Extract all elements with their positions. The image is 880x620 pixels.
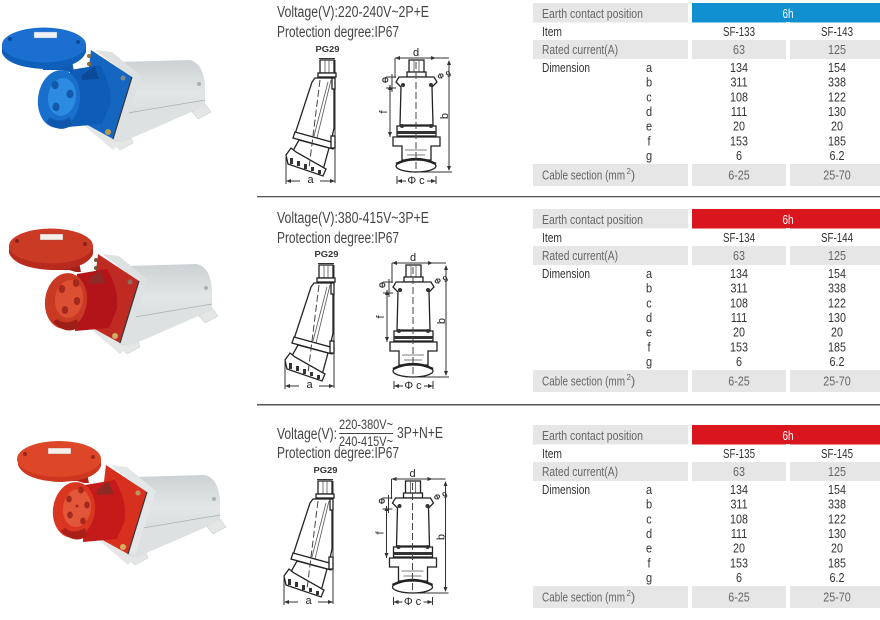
table: specifications SF-134 / SF-144: 63 [733, 249, 745, 263]
table: specifications SF-134 / SF-144: Earth contact position [542, 213, 643, 227]
icon: blue socket product photo [2, 28, 211, 150]
table: specifications SF-135 / SF-145: 6 [736, 571, 742, 585]
table: specifications SF-134 / SF-144: 311 [730, 282, 748, 296]
table: specifications SF-134 / SF-144: ) [631, 374, 635, 388]
table: specifications SF-135 / SF-145: Cable section (mm [542, 590, 625, 604]
table: specifications SF-134 / SF-144: a [646, 267, 652, 281]
table: specifications SF-135 / SF-145: 125 [828, 465, 846, 479]
table: specifications SF-134 / SF-144: SF-144 [821, 231, 853, 245]
table: specifications SF-135 / SF-145: Item [542, 447, 562, 461]
table: specifications SF-134 / SF-144: 25-70 [823, 375, 851, 389]
table: specifications SF-133 / SF-143: SF-143 [821, 25, 853, 39]
heading: protection degree: Protection degree:IP67 [277, 445, 399, 462]
table: specifications SF-133 / SF-143: Cable section (mm [542, 168, 625, 182]
table: specifications SF-133 / SF-143: 6h [782, 7, 794, 21]
table: specifications SF-134 / SF-144: f [647, 341, 651, 354]
diagram: front view: Φ [378, 497, 386, 506]
table: specifications SF-134 / SF-144: d [646, 311, 652, 325]
table: specifications SF-135 / SF-145 [533, 425, 880, 608]
heading: protection degree: Protection degree:IP67 [277, 230, 399, 247]
table: specifications SF-134 / SF-144: b [646, 282, 652, 296]
table: specifications SF-134 / SF-144: 130 [828, 311, 846, 325]
table: specifications SF-135 / SF-145: 185 [828, 557, 846, 571]
diagram: side view: PG29 [314, 466, 338, 475]
table: specifications SF-133 / SF-143: 108 [730, 91, 748, 105]
table: specifications SF-134 / SF-144: 153 [730, 341, 748, 355]
table: specifications SF-134 / SF-144: 6.2 [830, 355, 844, 369]
table: specifications SF-133 / SF-143: 153 [730, 135, 748, 149]
table: specifications SF-133 / SF-143: 2 [626, 167, 632, 176]
table: specifications SF-135 / SF-145: 108 [730, 513, 748, 527]
table: specifications SF-133 / SF-143: 130 [828, 105, 846, 119]
table: specifications SF-133 / SF-143: 111 [731, 105, 747, 119]
table: specifications SF-134 / SF-144: 125 [828, 249, 846, 263]
diagram: front view: f [375, 315, 387, 319]
table: specifications SF-134 / SF-144: Dimension [542, 267, 590, 281]
heading: voltage with fraction: 240-415V~ [339, 434, 393, 449]
heading: voltage: Voltage(V):220-240V~2P+E [277, 4, 429, 21]
diagram: front view: b [436, 534, 448, 540]
table: specifications SF-135 / SF-145: Dimension [542, 483, 590, 497]
table: specifications SF-135 / SF-145: b [646, 498, 652, 512]
panel: blue socket 2P+E [2, 3, 880, 187]
table: specifications SF-134 / SF-144: 20 [831, 326, 843, 340]
diagram: front view: b [436, 318, 448, 324]
diagram: front view: Φ g [432, 489, 449, 503]
table: specifications SF-135 / SF-145: ) [631, 590, 635, 604]
table: specifications SF-133 / SF-143: 6 [736, 149, 742, 163]
diagram: side view: a [306, 379, 313, 391]
table: specifications SF-134 / SF-144: 134 [730, 267, 748, 281]
table: specifications SF-135 / SF-145: 2 [626, 589, 632, 598]
table: specifications SF-133 / SF-143: 134 [730, 61, 748, 75]
table: specifications SF-134 / SF-144: 111 [731, 311, 747, 325]
table: specifications SF-135 / SF-145: 134 [730, 483, 748, 497]
divider lines [257, 196, 880, 406]
table: specifications SF-133 / SF-143: Rated current(A) [542, 43, 618, 57]
diagram: front view: Φ [379, 281, 386, 290]
heading: voltage with fraction: 3P+N+E [397, 425, 443, 442]
table: specifications SF-133 / SF-143: SF-133 [723, 25, 755, 39]
table: specifications SF-135 / SF-145: 153 [730, 557, 748, 571]
table: specifications SF-133 / SF-143: a [646, 61, 652, 75]
table: specifications SF-133 / SF-143: f [647, 135, 651, 148]
diagram: front view: d [410, 252, 416, 264]
table: specifications SF-134 / SF-144: 154 [828, 267, 846, 281]
diagram: front view: Φ c [407, 175, 425, 187]
heading: protection degree: Protection degree:IP67 [277, 24, 399, 41]
table: specifications SF-133 / SF-143: g [646, 149, 652, 163]
table: specifications SF-133 / SF-143: Earth contact position [542, 7, 643, 21]
diagram: front view: b [439, 113, 451, 119]
table: specifications SF-133 / SF-143: 6.2 [830, 149, 844, 163]
panel: red socket 3P+N+E [17, 417, 880, 608]
table: specifications SF-135 / SF-145: f [647, 557, 651, 570]
table: specifications SF-135 / SF-145: Earth contact position [542, 429, 643, 443]
table: specifications SF-135 / SF-145: 338 [828, 498, 846, 512]
heading: voltage with fraction [277, 417, 443, 449]
diagram: front view [374, 468, 449, 608]
heading: voltage: Voltage(V):380-415V~3P+E [277, 210, 429, 227]
table: specifications SF-135 / SF-145: 6h [782, 429, 794, 443]
diagram: side view [286, 45, 340, 186]
table: specifications SF-133 / SF-143: 6-25 [728, 169, 750, 183]
table: specifications SF-133 / SF-143: 20 [831, 120, 843, 134]
table: specifications SF-135 / SF-145: SF-145 [821, 447, 853, 461]
diagram: front view [375, 252, 449, 392]
table: specifications SF-133 / SF-143: 25-70 [823, 169, 851, 183]
table: specifications SF-135 / SF-145: d [646, 527, 652, 541]
table: specifications SF-134 / SF-144: Item [542, 231, 562, 245]
diagram: front view: f [374, 531, 386, 535]
icon: red socket product photo [9, 228, 218, 354]
table: specifications SF-133 / SF-143: c [646, 91, 652, 104]
table: specifications SF-133 / SF-143: 125 [828, 43, 846, 57]
table: specifications SF-133 / SF-143: 20 [733, 120, 745, 134]
panel: red socket 3P+E [9, 209, 880, 392]
table: specifications SF-134 / SF-144: 185 [828, 341, 846, 355]
table: specifications SF-135 / SF-145: 20 [733, 542, 745, 556]
table: specifications SF-135 / SF-145: 6-25 [728, 591, 750, 605]
table: specifications SF-135 / SF-145: 311 [730, 498, 748, 512]
table: specifications SF-133 / SF-143: 154 [828, 61, 846, 75]
table: specifications SF-134 / SF-144: 20 [733, 326, 745, 340]
table: specifications SF-134 / SF-144: Cable section (mm [542, 374, 625, 388]
table: specifications SF-135 / SF-145: 20 [831, 542, 843, 556]
diagram: front view: Φ [382, 76, 389, 85]
icon: red socket five-pin product photo [17, 441, 226, 565]
table: specifications SF-134 / SF-144: Rated current(A) [542, 249, 618, 263]
heading: voltage with fraction: 220-380V~ [339, 417, 393, 432]
table: specifications SF-133 / SF-143 [533, 3, 880, 186]
table: specifications SF-133 / SF-143: ) [631, 168, 635, 182]
diagram: side view: a [305, 595, 312, 607]
table: specifications SF-135 / SF-145: e [646, 542, 652, 556]
diagram: front view: Φ g [433, 273, 449, 287]
table: specifications SF-135 / SF-145: 6.2 [830, 571, 844, 585]
table: specifications SF-133 / SF-143: 122 [828, 91, 846, 105]
table: specifications SF-134 / SF-144: g [646, 355, 652, 369]
table: specifications SF-135 / SF-145: 130 [828, 527, 846, 541]
table: specifications SF-134 / SF-144: 6-25 [728, 375, 750, 389]
table: specifications SF-133 / SF-143: Dimension [542, 61, 590, 75]
table: specifications SF-134 / SF-144: 6h [782, 213, 794, 227]
diagram: front view: d [413, 47, 419, 59]
table: specifications SF-134 / SF-144: 122 [828, 297, 846, 311]
diagram: side view: PG29 [314, 250, 339, 259]
table: specifications SF-135 / SF-145: c [646, 513, 652, 526]
table: specifications SF-135 / SF-145: 111 [731, 527, 747, 541]
diagram: side view: a [307, 174, 314, 186]
diagram: side view: PG29 [316, 45, 340, 54]
diagram: front view: d [409, 468, 416, 480]
table: specifications SF-135 / SF-145: 25-70 [823, 591, 851, 605]
table: specifications SF-134 / SF-144: 6 [736, 355, 742, 369]
table: specifications SF-134 / SF-144: e [646, 326, 652, 340]
diagram: side view [285, 250, 339, 391]
diagram: front view: Φ c [404, 596, 422, 608]
table: specifications SF-135 / SF-145: SF-135 [723, 447, 755, 461]
table: specifications SF-134 / SF-144: 2 [626, 373, 632, 382]
diagram: front view [378, 47, 452, 187]
diagram: front view: Φ g [436, 68, 452, 82]
table: specifications SF-134 / SF-144: 338 [828, 282, 846, 296]
table: specifications SF-133 / SF-143: 63 [733, 43, 745, 57]
table: specifications SF-133 / SF-143: 185 [828, 135, 846, 149]
table: specifications SF-133 / SF-143: 311 [730, 76, 748, 90]
diagram: side view [284, 466, 338, 607]
heading: voltage with fraction: Voltage(V): [277, 426, 337, 443]
table: specifications SF-133 / SF-143: b [646, 76, 652, 90]
table: specifications SF-135 / SF-145: g [646, 571, 652, 585]
diagram: front view: Φ c [404, 380, 422, 392]
table: specifications SF-133 / SF-143: 338 [828, 76, 846, 90]
table: specifications SF-135 / SF-145: a [646, 483, 652, 497]
table: specifications SF-135 / SF-145: 63 [733, 465, 745, 479]
table: specifications SF-133 / SF-143: Item [542, 25, 562, 39]
table: specifications SF-134 / SF-144: c [646, 297, 652, 310]
diagram: front view: f [378, 110, 390, 114]
table: specifications SF-135 / SF-145: 122 [828, 513, 846, 527]
table: specifications SF-134 / SF-144: SF-134 [723, 231, 755, 245]
table: specifications SF-134 / SF-144: 108 [730, 297, 748, 311]
table: specifications SF-133 / SF-143: d [646, 105, 652, 119]
table: specifications SF-133 / SF-143: e [646, 120, 652, 134]
table: specifications SF-134 / SF-144 [533, 209, 880, 392]
table: specifications SF-135 / SF-145: Rated current(A) [542, 465, 618, 479]
table: specifications SF-135 / SF-145: 154 [828, 483, 846, 497]
